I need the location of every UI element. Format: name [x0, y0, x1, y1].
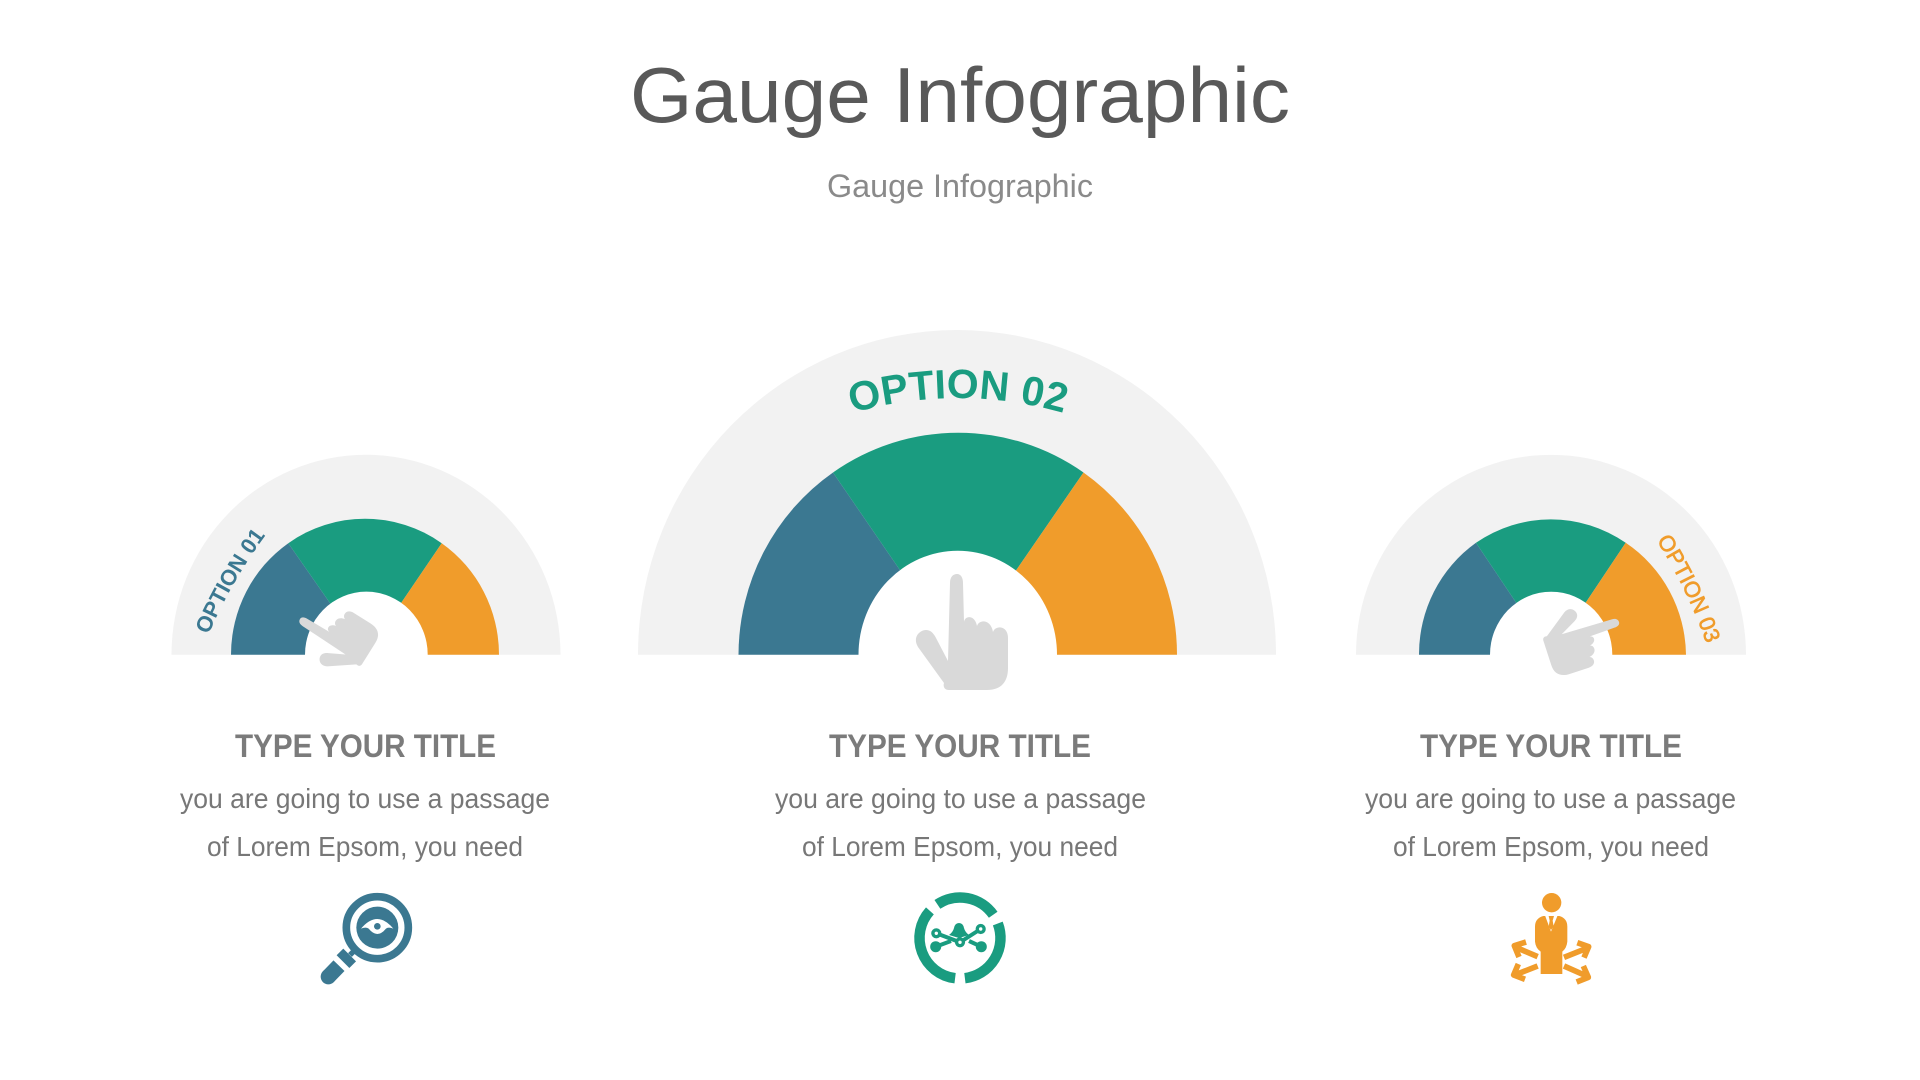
- segment: orange: [1551, 543, 1686, 655]
- panel: option 02 gauge: [638, 330, 1276, 690]
- body line 2: of Lorem Epsom, you need: [207, 831, 523, 862]
- segment: orange: [958, 472, 1177, 655]
- segment: green: [1476, 519, 1626, 655]
- body line 2: of Lorem Epsom, you need: [802, 831, 1118, 862]
- body line 1: you are going to use a passage: [775, 783, 1146, 814]
- gauge background: [1356, 455, 1746, 655]
- title: Gauge Infographic: [630, 51, 1290, 139]
- icon: segmented ring with network: [919, 898, 1000, 978]
- panel: option 01 gauge: [172, 455, 560, 666]
- segment: green: [833, 433, 1084, 655]
- gauge centre: [1490, 592, 1612, 657]
- card title: TYPE YOUR TITLE: [1420, 728, 1682, 764]
- option label: OPTION 03: [1659, 535, 1720, 642]
- text block: option 03: [1365, 728, 1736, 862]
- gauge background: [172, 455, 560, 655]
- icon: pointing hand: [916, 574, 1008, 690]
- icon: pointing hand: [1537, 596, 1630, 679]
- body line 1: you are going to use a passage: [180, 783, 550, 814]
- body line 2: of Lorem Epsom, you need: [1393, 831, 1709, 862]
- text block: option 02: [775, 728, 1146, 862]
- option label: OPTION 01: [197, 530, 266, 632]
- option label: OPTION 02: [850, 369, 1068, 412]
- segment: blue: [231, 543, 366, 655]
- card title: TYPE YOUR TITLE: [235, 728, 496, 764]
- panel: option 03 gauge: [1356, 455, 1746, 675]
- segment: green: [288, 519, 442, 655]
- gauge background: [638, 330, 1276, 655]
- text block: option 01: [180, 728, 550, 862]
- subtitle: Gauge Infographic: [827, 168, 1093, 204]
- gauge centre: [305, 592, 428, 657]
- gauge centre: [858, 551, 1057, 657]
- card title: TYPE YOUR TITLE: [829, 728, 1091, 764]
- body line 1: you are going to use a passage: [1365, 783, 1736, 814]
- segment: blue: [738, 472, 958, 655]
- icon: pointing hand: [299, 612, 378, 666]
- icon: businessman with arrows: [1514, 893, 1589, 982]
- icon: magnifier with eye: [321, 897, 408, 984]
- segment: orange: [366, 543, 499, 655]
- segment: blue: [1419, 543, 1551, 655]
